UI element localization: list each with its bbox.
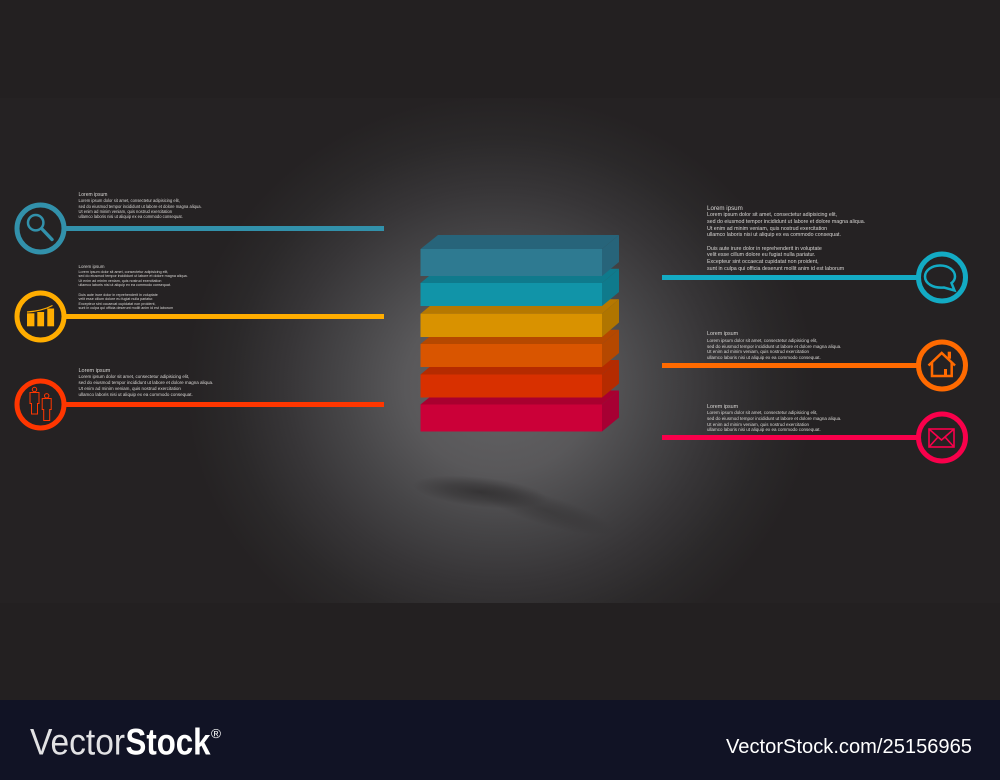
text: chat: Duis aute irure dolor in reprehenderit in voluptate (707, 246, 822, 252)
icon: envelope (929, 429, 954, 447)
text: chart: sed do eiusmod tempor incididunt ut labore et dolore magna aliqua. (78, 274, 188, 278)
icon: magnifier (28, 215, 52, 240)
icon: bar chart (27, 306, 54, 326)
footer logo (30, 722, 221, 762)
text: chart: Ut enim ad minim veniam, quis nostrud exercitation (78, 279, 161, 283)
block 2 teal (420, 269, 619, 306)
text: chat: Lorem ipsum dolor sit amet, consectetur adipisicing elit, (707, 212, 837, 218)
text: mail: Ut enim ad minim veniam, quis nostrud exercitation (707, 422, 809, 427)
text: chart: velit esse cillum dolore eu fugiat nulla pariatur. (78, 297, 153, 301)
text: chat: ullamco laboris nisi ut aliquip ex ea commodo consequat. (707, 232, 841, 238)
text: people: ullamco laboris nisi ut aliquip ex ea commodo consequat. (78, 392, 193, 396)
text: chart: Duis aute irure dolor in reprehenderit in voluptate (78, 293, 158, 297)
text: home (707, 331, 841, 360)
footer logo: Stock (126, 722, 211, 762)
connector: people (17, 381, 384, 428)
text: chart: Excepteur sint occaecat cupidatat non proident, (78, 302, 156, 306)
text: chart: ullamco laboris nisi ut aliquip ex ea commodo consequat. (78, 283, 171, 287)
block 6 crimson (420, 390, 619, 432)
footer logo: ® (211, 726, 221, 741)
icon: house (928, 352, 955, 376)
text: chat: Excepteur sint occaecat cupidatat non proident, (707, 259, 819, 265)
text: chart: Lorem ipsum (78, 264, 105, 269)
text: search (78, 192, 202, 219)
text: people: Lorem ipsum (78, 368, 110, 374)
block 1 blue (420, 235, 619, 276)
footer bar (0, 700, 1000, 780)
footer logo: Vector (30, 722, 125, 762)
text: home: Lorem ipsum (707, 331, 738, 337)
connector: search (17, 205, 384, 252)
connector: home (662, 342, 966, 389)
text: search: ullamco laboris nisi ut aliquip ex ea commodo consequat. (78, 214, 183, 219)
footer image id: VectorStock.com/25156965 (726, 735, 972, 758)
text: chart: Lorem ipsum dolor sit amet, consectetur adipisicing elit, (78, 270, 168, 274)
text: search: Lorem ipsum dolor sit amet, consectetur adipisicing elit, (78, 198, 180, 203)
text: chat: velit esse cillum dolore eu fugiat nulla pariatur. (707, 252, 815, 258)
text: chat: sunt in culpa qui officia deserunt mollit anim id est laborum (707, 266, 844, 272)
text: mail: ullamco laboris nisi ut aliquip ex ea commodo consequat. (707, 427, 821, 432)
text: people: Ut enim ad minim veniam, quis nostrud exercitation (78, 386, 181, 391)
text: people (78, 368, 213, 397)
text: chart: sunt in culpa qui officia deserunt mollit anim id est laborum (78, 306, 173, 310)
block shadow (411, 470, 618, 545)
block 4 orange (420, 330, 619, 367)
text: chart (78, 264, 188, 310)
text: search: sed do eiusmod tempor incididunt ut labore et dolore magna aliqua. (78, 204, 202, 209)
text: people: sed do eiusmod tempor incididunt ut labore et dolore magna aliqua. (78, 380, 213, 385)
text: home: Ut enim ad minim veniam, quis nostrud exercitation (707, 349, 809, 354)
text: home: ullamco laboris nisi ut aliquip ex ea commodo consequat. (707, 355, 821, 360)
text: home: Lorem ipsum dolor sit amet, consectetur adipisicing elit, (707, 338, 818, 343)
text: mail: Lorem ipsum (707, 404, 738, 410)
text: people: Lorem ipsum dolor sit amet, consectetur adipisicing elit, (78, 374, 189, 379)
connector: mail (662, 414, 966, 461)
block 5 red (420, 360, 619, 398)
icon: speech bubble (925, 266, 955, 290)
stacked 3D blocks (420, 235, 619, 432)
text: chat: Ut enim ad minim veniam, quis nostrud exercitation (707, 226, 827, 232)
text: mail: sed do eiusmod tempor incididunt ut labore et dolore magna aliqua. (707, 416, 841, 421)
text: home: sed do eiusmod tempor incididunt ut labore et dolore magna aliqua. (707, 344, 841, 349)
block 3 amber (420, 299, 619, 337)
text: chat: sed do eiusmod tempor incididunt ut labore et dolore magna aliqua. (707, 219, 865, 225)
text: search: Ut enim ad minim veniam, quis nostrud exercitation (78, 209, 172, 214)
connector: chart (17, 293, 384, 340)
icon: people (30, 387, 51, 420)
text: mail: Lorem ipsum dolor sit amet, consectetur adipisicing elit, (707, 410, 818, 415)
connector: chat (662, 254, 966, 301)
text: chat (707, 204, 865, 272)
text: chat: Lorem ipsum (707, 204, 743, 212)
text: search: Lorem ipsum (78, 192, 107, 198)
text: mail (707, 404, 841, 432)
